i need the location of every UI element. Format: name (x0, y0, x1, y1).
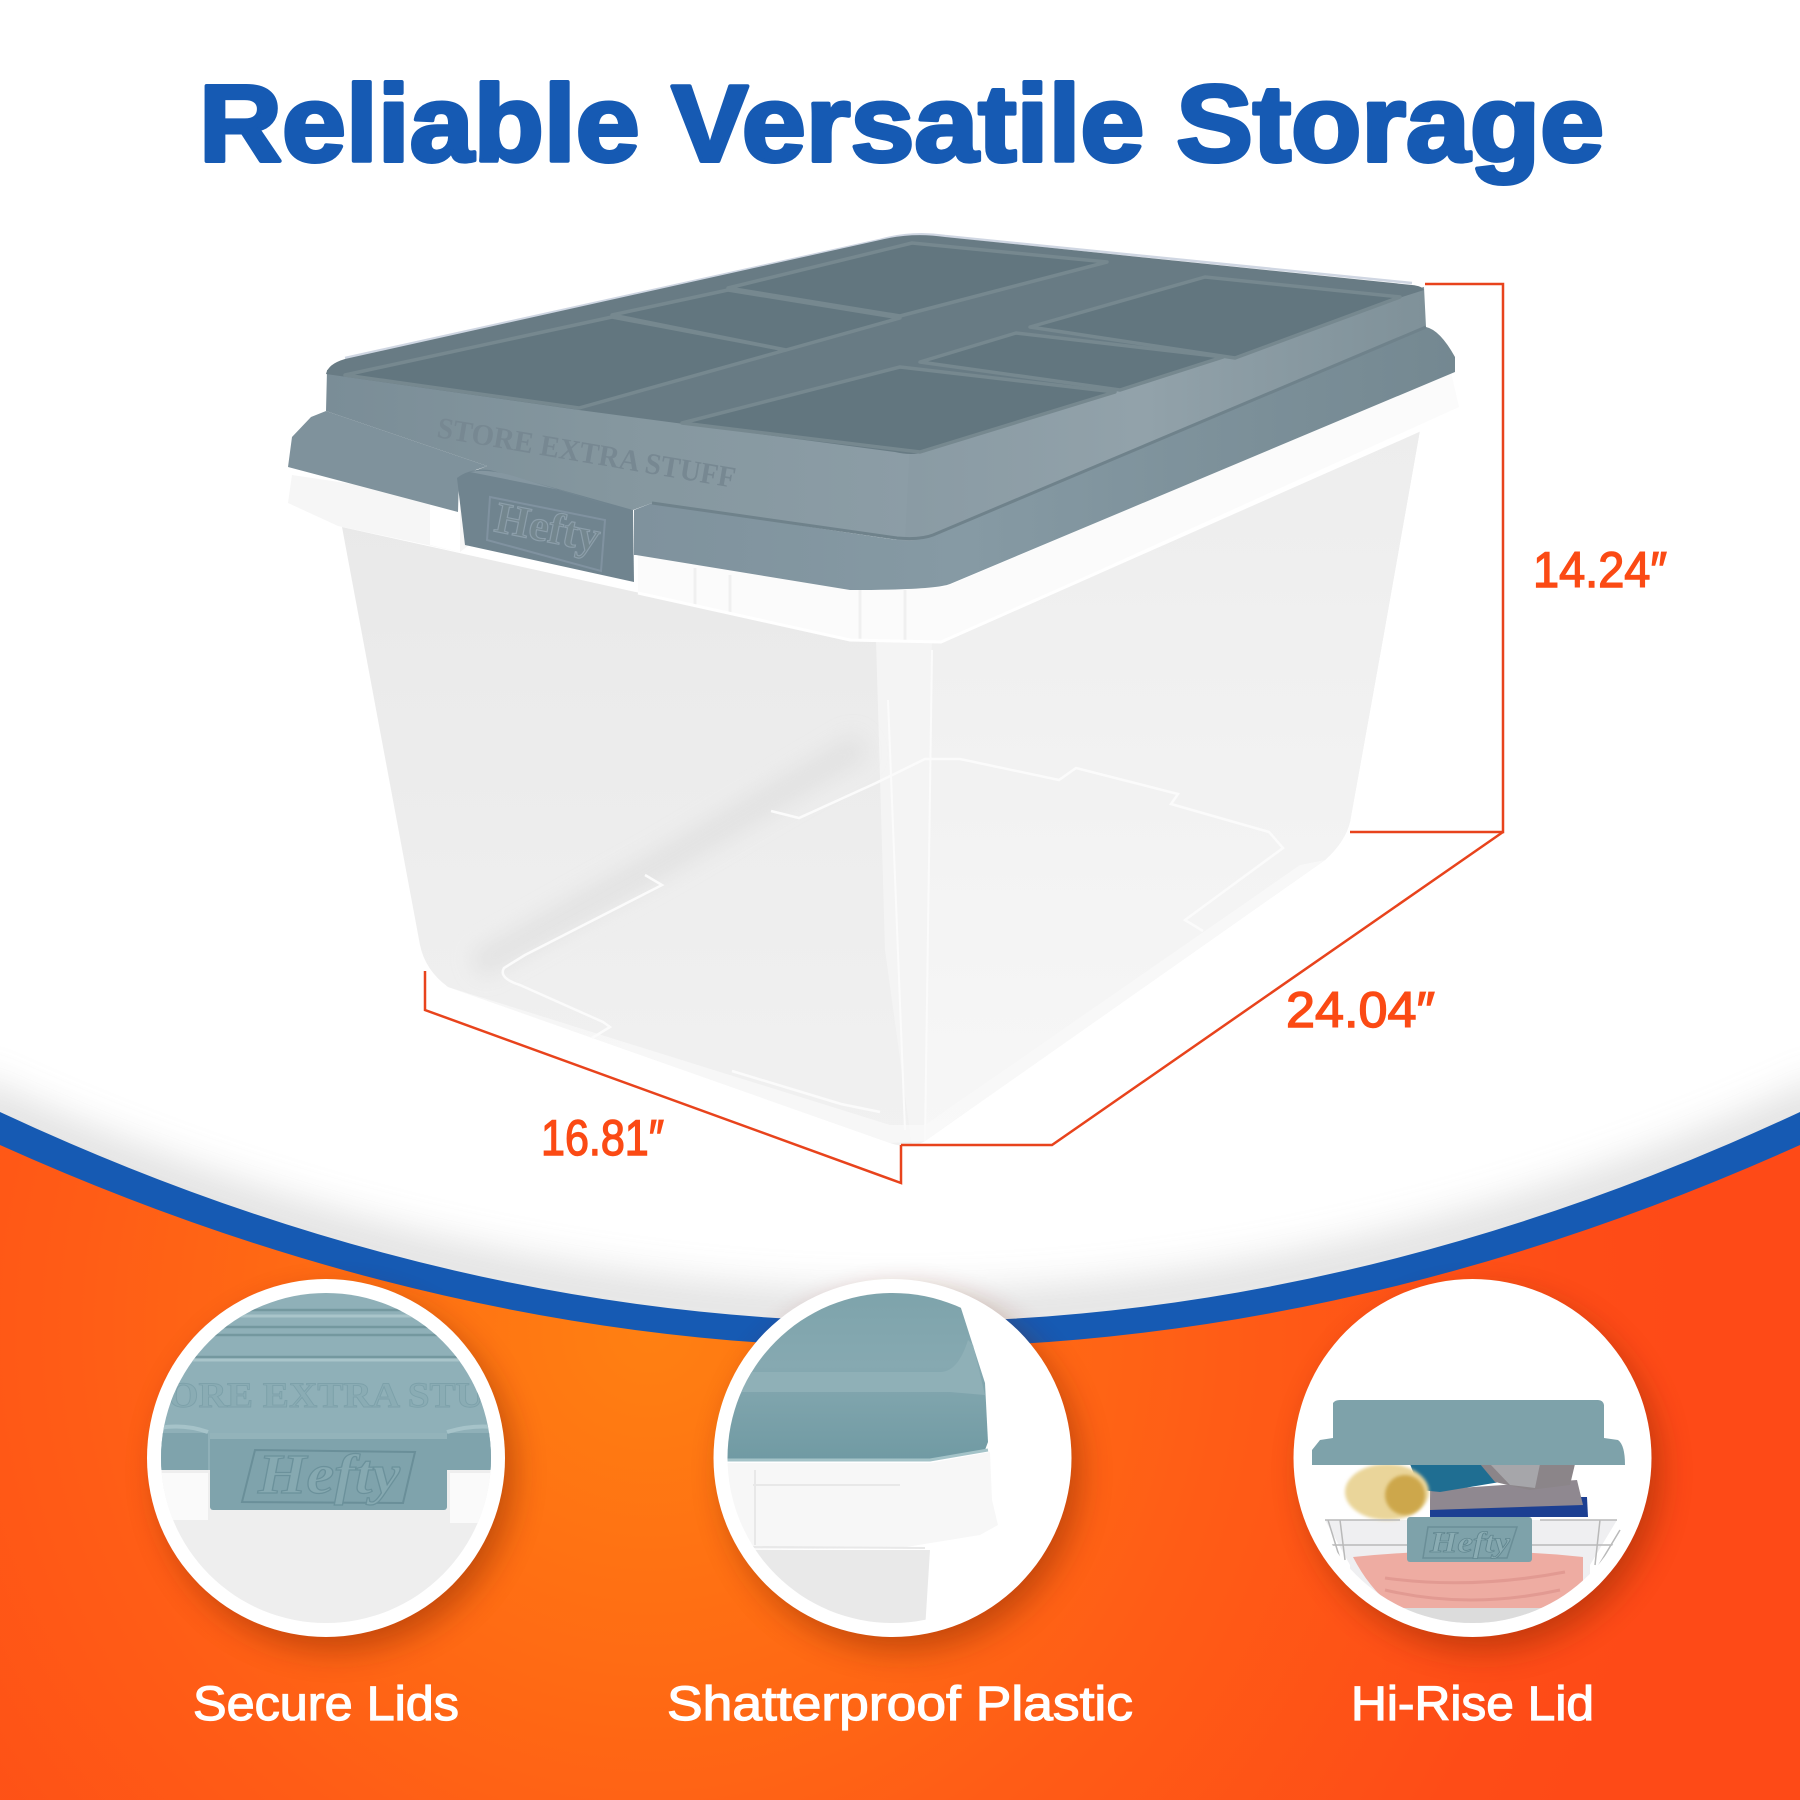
lid flange groove (652, 327, 1426, 539)
feature: hi-rise lid circle (1294, 1279, 1660, 1650)
lid front-left face (326, 370, 912, 541)
label: shatterproof plastic: Shatterproof Plastic (667, 1678, 1133, 1731)
bin floor outline (503, 759, 1283, 1112)
length label: 24.04″ (1286, 982, 1435, 1038)
lid recessed panels (345, 243, 1400, 452)
lid (288, 234, 1455, 590)
lid front-right face (905, 287, 1426, 541)
lid top plate (326, 235, 1424, 454)
clear bin frame (1325, 1519, 1620, 1565)
orange footer panel (0, 1143, 1800, 1800)
bin rim (288, 372, 1459, 642)
soft grey shadow above the wave (0, 1095, 1800, 1315)
clasp with Hefty logo (457, 470, 634, 582)
dimension: width (425, 971, 901, 1183)
storage bin product illustration (288, 234, 1459, 1146)
dimension: height (1350, 284, 1667, 832)
clasp with Hefty logo: Hefty (1429, 1526, 1511, 1559)
feature: shatterproof plastic circle (714, 1250, 1080, 1650)
embossed lid text: STORE EXTRA STUFF (435, 411, 738, 495)
blue wave band (0, 1112, 1800, 1348)
feature: secure lids circle (147, 1279, 514, 1650)
clasp with Hefty logo (1407, 1517, 1532, 1562)
width label: 16.81″ (541, 1110, 664, 1166)
title: Reliable Versatile Storage (199, 63, 1604, 185)
feature: secure lids circle: ORE EXTRA STU (168, 1375, 484, 1415)
folded clothes inside the bin (1345, 1464, 1588, 1630)
dimension: length (901, 832, 1503, 1145)
bin body (342, 430, 1420, 1146)
lid right flange (634, 327, 1455, 590)
hi-rise lid (1312, 1400, 1625, 1465)
lid back edge highlight (345, 234, 1412, 358)
clear bin interior (1326, 1520, 1616, 1593)
lid left flange (288, 411, 487, 512)
height label: 14.24″ (1533, 542, 1667, 598)
feature: secure lids circle: Hefty (257, 1444, 401, 1506)
label: secure lids: Secure Lids (193, 1678, 459, 1731)
clasp with Hefty logo: Hefty (491, 493, 605, 562)
label: hi-rise lid: Hi-Rise Lid (1351, 1678, 1594, 1731)
